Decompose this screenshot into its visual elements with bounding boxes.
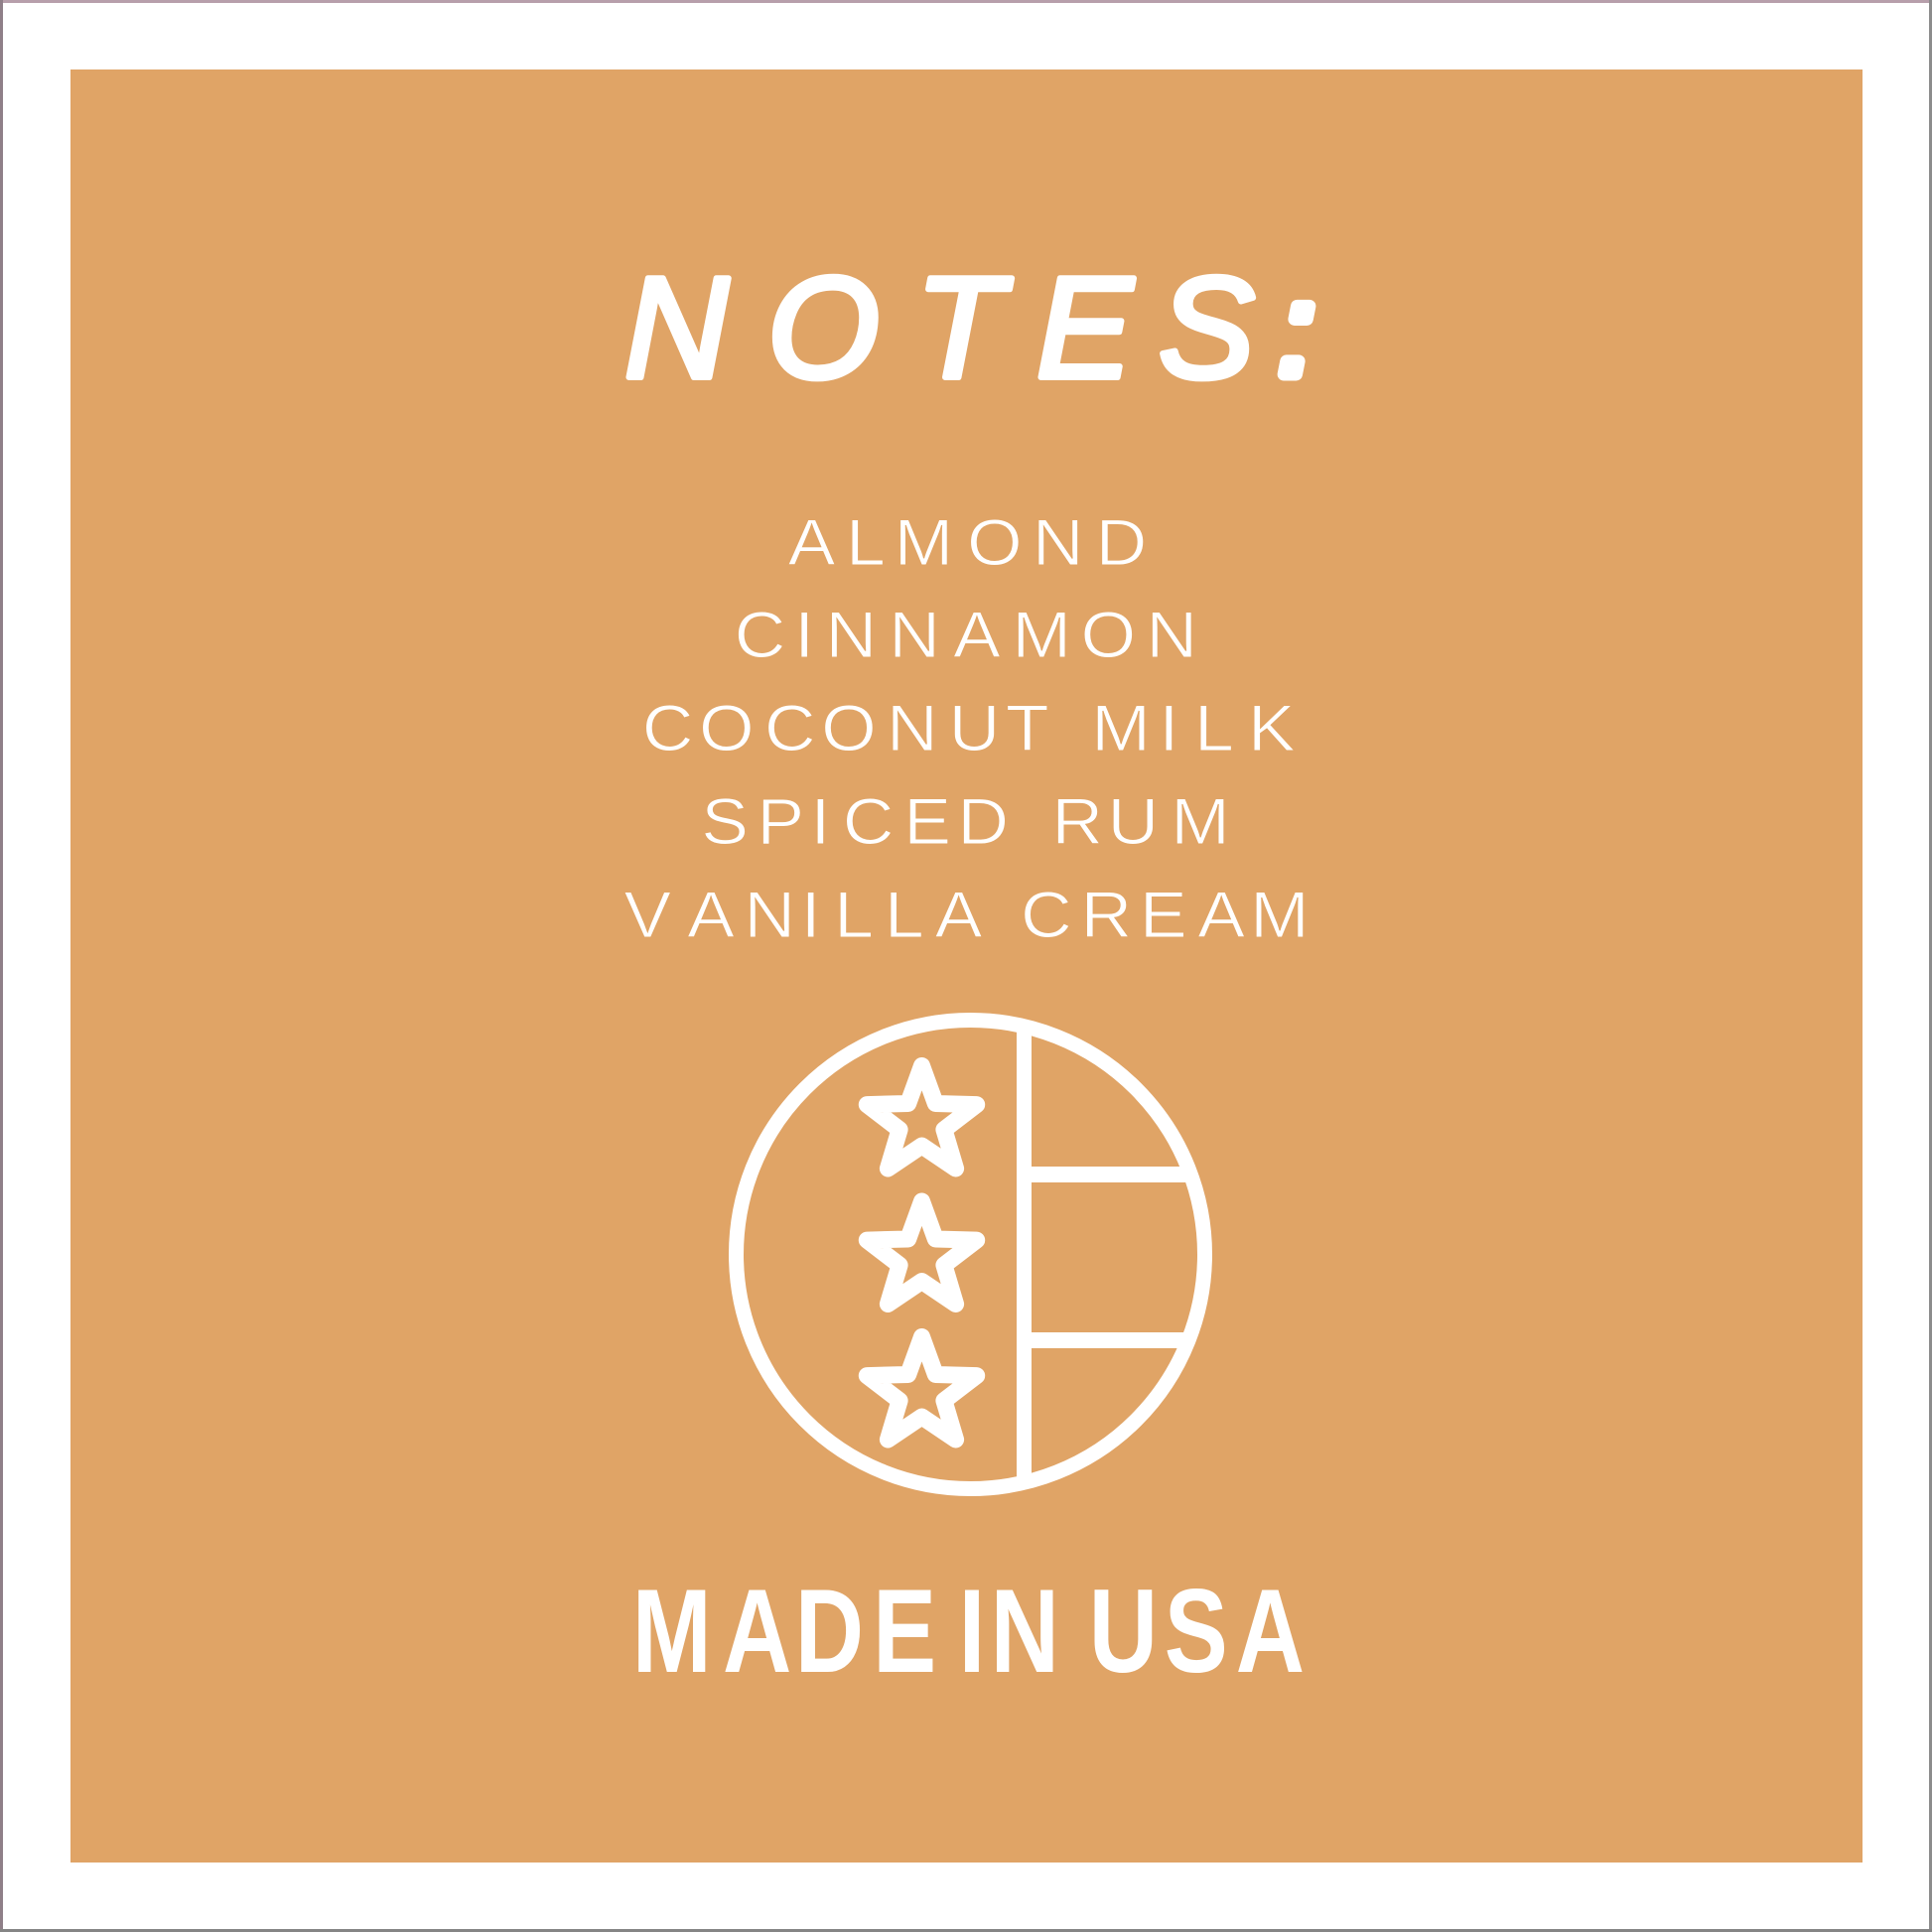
label: made in usa: MADE IN USA xyxy=(632,1566,1305,1699)
note: spiced rum: SPICED RUM xyxy=(701,784,1230,858)
title: : xyxy=(1279,257,1314,402)
icon: flag upper stripe line xyxy=(1024,1167,1191,1182)
note: cinnamon: CINNAMON xyxy=(735,598,1197,671)
icon: star 1 xyxy=(867,1066,977,1169)
icon: flag circle outline xyxy=(737,1021,1205,1489)
icon: flag lower stripe line xyxy=(1024,1332,1189,1348)
text block: list of scent notes xyxy=(624,505,1310,951)
icon: round USA flag with three stars xyxy=(737,1021,1205,1489)
icon: star 3 xyxy=(867,1336,977,1440)
note: coconut milk: COCONUT MILK xyxy=(642,691,1296,764)
icon: flag vertical divider xyxy=(1017,1026,1032,1483)
title: NOTES xyxy=(624,247,1255,408)
note: almond: ALMOND xyxy=(788,505,1147,579)
icon: star 2 xyxy=(867,1201,977,1305)
note: vanilla cream: VANILLA CREAM xyxy=(624,878,1310,951)
